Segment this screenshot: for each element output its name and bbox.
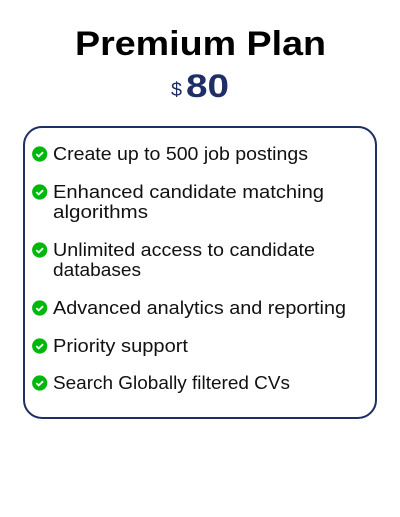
price: 80	[186, 68, 229, 104]
feature: database access	[32, 240, 315, 280]
feature: matching algorithms: Enhanced candidate matching	[53, 182, 324, 202]
feature: job postings: Create up to 500 job postings	[53, 144, 308, 164]
price	[171, 68, 229, 104]
feature: matching algorithms	[32, 182, 324, 222]
feature: database access: Unlimited access to candidate	[53, 240, 315, 260]
feature: matching algorithms: algorithms	[53, 202, 148, 222]
title: Premium Plan	[75, 25, 326, 63]
feature: global CV search: Search Globally filtered CVs	[53, 373, 290, 393]
feature: priority support: Priority support	[53, 336, 188, 356]
feature: analytics: Advanced analytics and reporting	[53, 298, 346, 318]
feature: database access: databases	[53, 260, 141, 280]
panel: features card	[24, 127, 376, 418]
price: $	[171, 80, 182, 101]
